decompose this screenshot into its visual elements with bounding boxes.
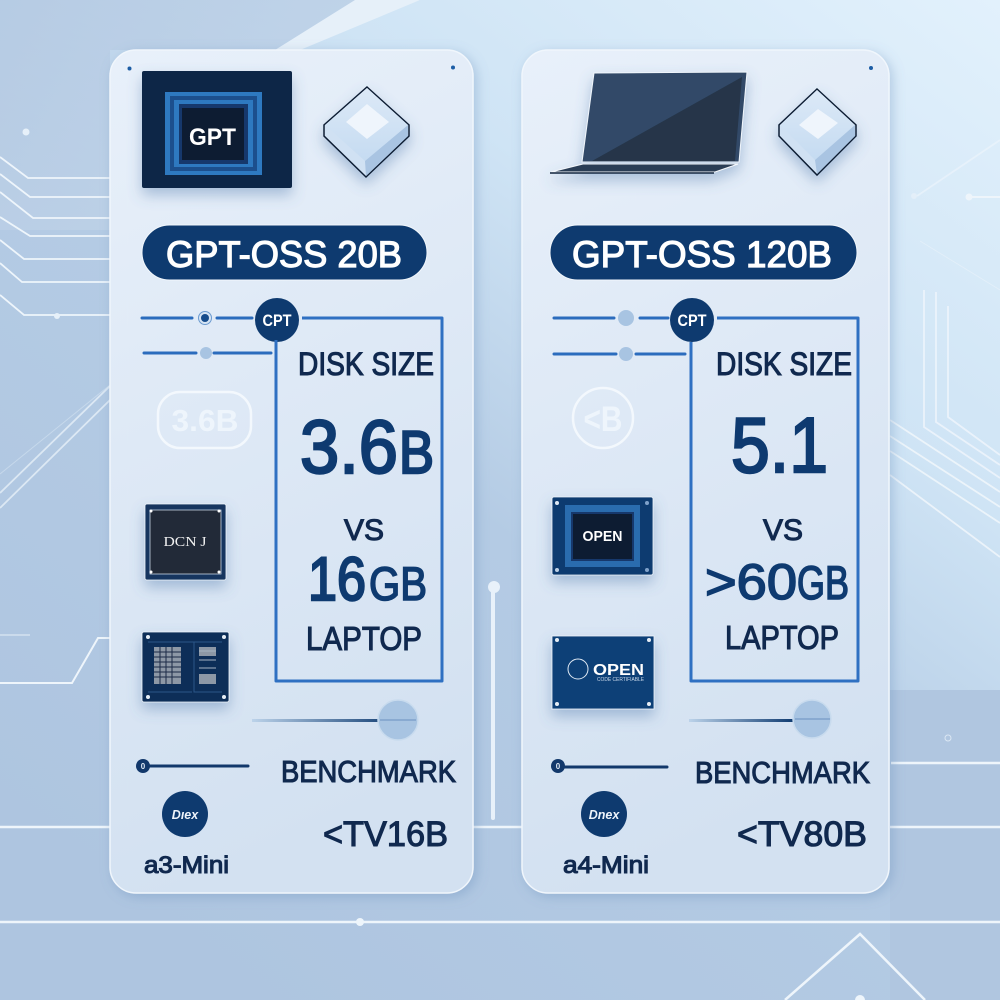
benchmark label: BENCHMARK — [695, 755, 870, 790]
benchmark slider — [252, 700, 418, 740]
icon: OPEN board — [552, 636, 654, 709]
connector sliders — [142, 312, 271, 359]
3.6B outline badge — [158, 392, 251, 448]
icon: OPEN board: OPEN — [593, 662, 644, 679]
disk size comparison box: 5.1 — [731, 401, 828, 489]
disk size comparison box — [691, 318, 858, 681]
<B outline badge: <B — [584, 400, 622, 439]
CPT badge — [670, 298, 714, 342]
benchmark label: BENCHMARK — [281, 754, 456, 789]
panel: GPT-OSS 120B — [522, 50, 889, 893]
icon: OPEN chip: OPEN — [582, 528, 622, 545]
disk size comparison box: >60 — [705, 554, 797, 610]
title pill — [550, 225, 857, 280]
title pill: GPT-OSS 120B — [572, 234, 832, 275]
icon: crystal diamond — [779, 89, 856, 175]
CPT badge: CPT — [262, 311, 292, 330]
benchmark value: <TV16B — [323, 815, 448, 854]
icon: crystal diamond — [324, 87, 409, 177]
disk size comparison box: DISK SIZE — [716, 346, 852, 382]
icon: GPT chip: GPT — [189, 124, 236, 151]
disk size comparison box: LAPTOP — [725, 619, 839, 656]
small slider — [136, 759, 248, 773]
small slider: 0 — [556, 762, 561, 771]
icon: DCN J chip: DCN J — [164, 535, 207, 550]
disk size comparison box: 16 — [308, 545, 366, 613]
disk size comparison box — [276, 318, 442, 681]
benchmark value: <TV80B — [737, 815, 867, 854]
small slider: 0 — [141, 762, 146, 771]
small slider — [551, 759, 667, 773]
Diex badge — [162, 791, 208, 837]
Dnex badge — [581, 791, 627, 837]
title pill — [142, 225, 427, 280]
model label: a4-Mini — [563, 852, 649, 879]
icon: circuit board — [142, 632, 229, 702]
model label: a3-Mini — [144, 852, 229, 879]
CPT badge — [255, 298, 299, 342]
disk size comparison box: 3.6 — [300, 405, 398, 489]
connector sliders — [554, 310, 685, 361]
disk size comparison box: GB — [369, 557, 427, 610]
icon: DCN J chip — [145, 504, 226, 580]
benchmark slider — [689, 700, 831, 738]
icon: OPEN chip — [552, 497, 653, 575]
<B outline badge — [573, 388, 633, 448]
Diex badge: Dıex — [172, 808, 199, 822]
center connector line — [488, 581, 500, 820]
disk size comparison box: VS — [344, 514, 384, 547]
icon: OPEN board: CODE CERTIFIABLE — [597, 677, 645, 683]
disk size comparison box: B — [399, 419, 434, 486]
icon: GPT chip — [142, 71, 292, 188]
title pill: GPT-OSS 20B — [166, 234, 402, 275]
disk size comparison box: DISK SIZE — [298, 346, 434, 382]
3.6B outline badge: 3.6B — [172, 403, 238, 438]
icon: laptop — [550, 72, 747, 173]
CPT badge: CPT — [678, 311, 707, 330]
disk size comparison box: GB — [797, 556, 849, 609]
panel: GPT-OSS 20B — [110, 50, 473, 893]
Dnex badge: Dnex — [589, 808, 620, 822]
disk size comparison box: VS — [763, 514, 803, 547]
disk size comparison box: LAPTOP — [306, 620, 422, 657]
